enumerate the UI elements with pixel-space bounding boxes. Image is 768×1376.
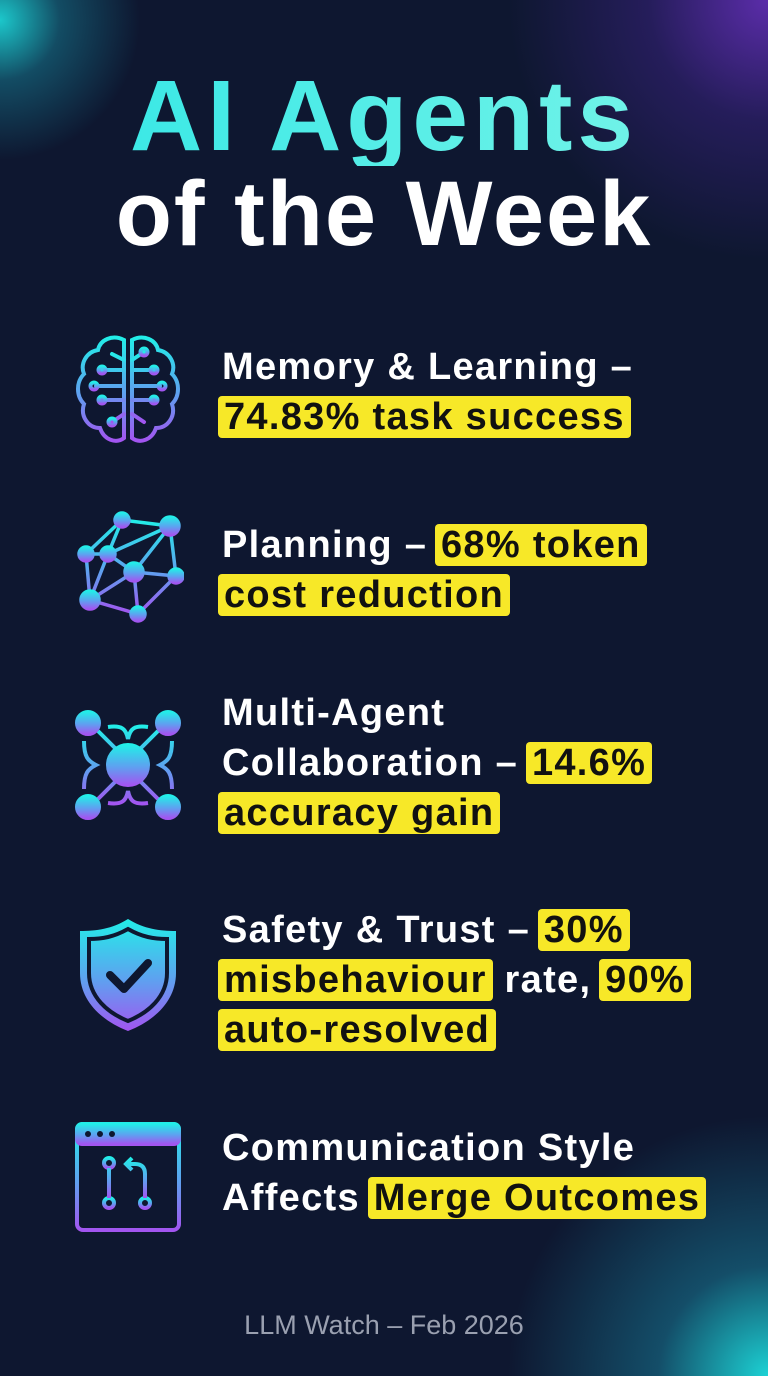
icon: multi-agent (75, 710, 181, 820)
text: memory: Memory & Learning – (222, 346, 633, 388)
title: AI Agents (130, 60, 638, 172)
icon: brain (76, 336, 180, 443)
footer: LLM Watch – Feb 2026 (244, 1310, 524, 1340)
icon: shield (80, 919, 176, 1031)
text: safety: Safety & Trust – 30% (222, 909, 624, 951)
text: communication: Communication Style (222, 1127, 635, 1169)
text: communication: Affects Merge Outcomes (222, 1177, 700, 1219)
text: safety: auto-resolved (224, 1009, 490, 1051)
text: multi-agent (218, 692, 652, 834)
text: communication (222, 1127, 706, 1219)
text: memory: 74.83% task success (224, 396, 625, 438)
text: memory (218, 346, 633, 438)
title (116, 60, 652, 265)
icon: network (77, 511, 184, 623)
text: multi-agent: Collaboration – 14.6% (222, 742, 646, 784)
text: multi-agent: accuracy gain (224, 792, 494, 834)
text: multi-agent: Multi-Agent (222, 692, 445, 734)
text: planning: cost reduction (224, 574, 504, 616)
text: planning (218, 524, 647, 616)
text: safety: misbehaviour rate, 90% (224, 959, 685, 1001)
text: safety (218, 909, 691, 1051)
text: planning: Planning – 68% token (222, 524, 641, 566)
title: of the Week (116, 163, 652, 265)
icon: merge window (75, 1122, 181, 1232)
